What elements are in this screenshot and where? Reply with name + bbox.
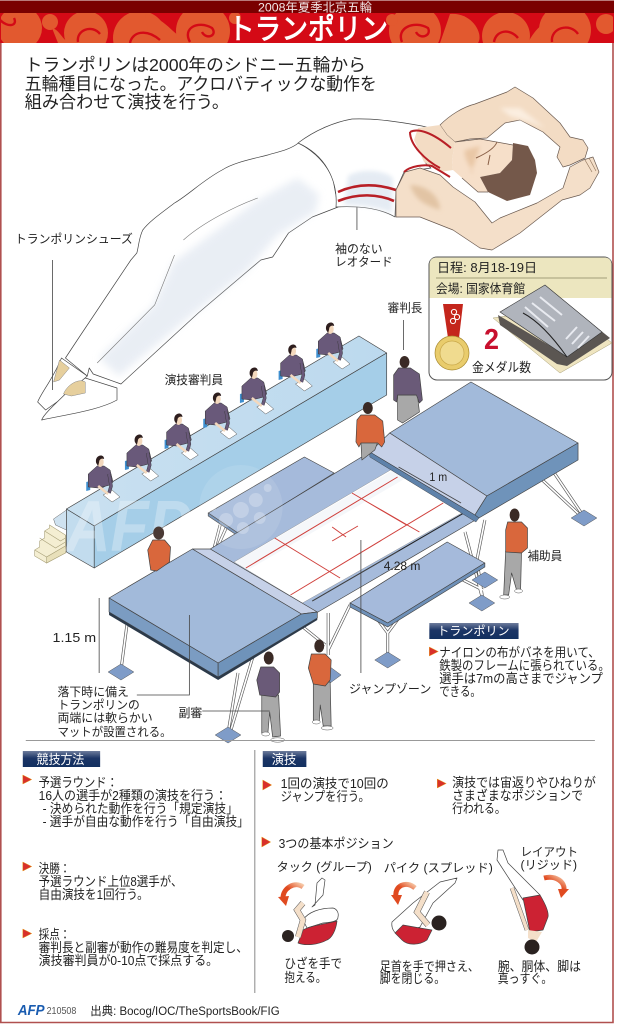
source: 出典: Bocog/IOC/TheSportsBook/FIG: [90, 1004, 280, 1018]
bullet: qualifying: 予選ラウンド：: [39, 775, 118, 790]
intro text: 組み合わせて演技を行う。: [25, 92, 229, 112]
far end mat: [370, 382, 578, 522]
watermark: AFP: [64, 487, 191, 567]
label: gold medals: 金メダル数: [472, 360, 531, 375]
chief judge figure: [394, 356, 422, 423]
bullet: final: [23, 861, 182, 902]
figure: tuck: [278, 878, 338, 945]
heading: trampoline: トランポリン: [437, 624, 510, 638]
gymnast legs and trousers: [38, 143, 338, 420]
dimension: 1 m: 1 m: [429, 470, 447, 484]
label: jump zone: ジャンプゾーン: [349, 682, 431, 696]
judges row: [86, 323, 350, 502]
header band: [0, 0, 614, 43]
judge 6: [279, 345, 312, 391]
caption: tuck: 抱える。: [285, 970, 326, 985]
intro text: [25, 55, 377, 112]
heading: routine: [263, 751, 306, 767]
bullet: qualifying: 16人の選手が2種類の演技を行う：: [39, 788, 227, 803]
leg lines: [121, 473, 584, 733]
label: tuck: タック (グループ): [277, 860, 372, 874]
rotation arrow: tuck: [278, 885, 303, 906]
trousers: [65, 143, 338, 384]
gymnast torso, arms and head: [298, 87, 599, 250]
label: sleeveless leotard: レオタード: [335, 255, 393, 269]
caption: layout: 真っすぐ。: [498, 971, 552, 986]
note: mats: 両端には軟らかい: [58, 710, 153, 725]
label: pike: パイク (スプレッド): [384, 861, 493, 875]
sock and shoe: near foot: [42, 378, 117, 420]
position figures: [278, 850, 569, 954]
hair: [480, 143, 537, 201]
judge 2: [125, 435, 159, 481]
bullet: final: 予選ラウンド上位8選手が、: [39, 874, 182, 889]
section: competition format: [23, 751, 249, 968]
leotard: [298, 119, 452, 217]
info box: [429, 257, 612, 380]
caption: pike: [380, 959, 479, 986]
bullet: ten jumps: [263, 776, 389, 804]
face: [452, 139, 513, 192]
helper figure: [500, 508, 527, 599]
deck left: [208, 457, 334, 550]
upper arm: [440, 87, 588, 167]
label: side referee: 副審: [178, 706, 202, 720]
bullet: scoring: [23, 927, 248, 968]
sock and shoe: far foot: [38, 358, 87, 410]
bullet: scoring: 演技審判員が0-10点で採点する。: [39, 953, 218, 968]
side decks and trampoline legs: [108, 457, 597, 743]
schedule: 日程: 8月18-19日: [437, 260, 537, 275]
judges' table: [54, 336, 387, 568]
note: mats: 落下時に備え: [58, 685, 129, 699]
AFP logo: AFP: [17, 1002, 45, 1019]
icon: stadium: [493, 285, 612, 373]
label: sleeveless leotard: [335, 242, 393, 269]
caption: pike: 脚を閉じる。: [380, 971, 445, 986]
shoulder: [414, 125, 455, 172]
leotard stripes: [338, 185, 396, 201]
heading: competition format: [23, 751, 100, 767]
dimension: 1.15 m: 1.15 m: [53, 630, 96, 645]
label: performance judges: 演技審判員: [165, 373, 223, 387]
bullet: qualifying: - 決められた動作を行う「規定演技」: [43, 801, 238, 816]
note: mats: マットが設置される。: [58, 724, 172, 739]
rotation arrow: layout: [544, 877, 569, 898]
bullet: qualifying: [23, 775, 249, 829]
bullet: somersaults: さまざまなポジションで: [452, 788, 583, 803]
foot plates: [108, 510, 597, 743]
caption: layout: [498, 959, 581, 986]
label: layout: [521, 845, 578, 872]
bullet: somersaults: 演技では宙返りやひねりが: [452, 775, 596, 790]
straps: [404, 131, 451, 177]
bullet: final: 決勝：: [39, 861, 70, 876]
bullet: ten jumps: ジャンプを行う。: [281, 789, 370, 804]
caption: tuck: ひざを手で: [285, 956, 342, 971]
text: trampoline description: できる。: [439, 684, 481, 699]
bullet: somersaults: 行われる。: [452, 801, 506, 816]
label: trampoline shoes: トランポリンシューズ: [15, 231, 133, 246]
bullet: three positions: 3つの基本ポジション: [279, 836, 394, 851]
top step platform: [54, 510, 66, 530]
caption: pike: 足首を手で押さえ、: [380, 959, 479, 974]
bullet: scoring: 審判長と副審が動作の難易度を判定し、: [39, 940, 248, 955]
label: layout: (リジッド): [521, 858, 577, 872]
trampoline frame and bed: [210, 452, 479, 613]
heading: routine: 演技: [272, 752, 297, 767]
side referee figure: [257, 652, 285, 742]
judge 3: [165, 414, 198, 460]
watermark: [64, 465, 283, 567]
text: trampoline description: 選手は7mの高さまでジャンプ: [439, 671, 603, 686]
heading: competition format: 競技方法: [37, 752, 84, 767]
leader lines: [53, 203, 461, 711]
date code: 210508: [47, 1006, 77, 1017]
note: mats: [58, 685, 172, 739]
judge 7: [316, 323, 350, 369]
bullet: ten jumps: 1回の演技で10回の: [281, 776, 389, 791]
label: layout: レイアウト: [521, 845, 578, 859]
caption: tuck: [285, 956, 342, 985]
bullet: final: 自由演技を1回行う。: [39, 887, 149, 902]
label: sleeveless leotard: 袖のない: [335, 242, 383, 256]
figure: layout: [497, 850, 569, 954]
bullet: somersaults: [437, 775, 596, 816]
near end mat: [109, 549, 317, 680]
deck right: [350, 542, 485, 627]
lower arm and chest: [396, 157, 599, 250]
label: chief judge: 審判長: [388, 301, 422, 315]
judge 4: [203, 393, 237, 439]
red lines: [246, 477, 443, 595]
dimension: 4.28 m: 4.28 m: [384, 559, 420, 573]
number of gold medals: 2: [484, 324, 499, 356]
judge 5: [240, 368, 274, 414]
subtitle: 2008年夏季北京五輪: [258, 0, 372, 14]
gold medal icon: [435, 304, 469, 370]
judge 1: [86, 456, 120, 502]
figure: pike: [391, 878, 457, 944]
divider: [26, 740, 595, 742]
text: trampoline description: [429, 645, 610, 699]
stairs: [35, 525, 65, 563]
note: mats: トランポリンの: [58, 698, 140, 712]
section: routine: [262, 751, 596, 986]
venue: 会場: 国家体育館: [436, 281, 525, 296]
title: トランポリン: [228, 13, 388, 46]
official in orange centre: [308, 640, 333, 730]
intro text: トランポリンは2000年のシドニー五輪から: [25, 55, 366, 75]
official in orange at left: [148, 526, 171, 571]
footer: [17, 1002, 280, 1019]
rotation arrow: pike: [391, 884, 415, 905]
label: helper: 補助員: [527, 549, 562, 563]
official in orange behind mat: [356, 402, 385, 460]
text: trampoline description: ナイロンの布がバネを用いて、: [439, 645, 600, 660]
caption: layout: 腕、胴体、脚は: [498, 959, 581, 974]
bullet: scoring: 採点：: [39, 927, 70, 942]
intro text: 五輪種目になった。アクロバティックな動作を: [25, 74, 377, 94]
bullet: qualifying: - 選手が自由な動作を行う「自由演技」: [43, 814, 249, 829]
